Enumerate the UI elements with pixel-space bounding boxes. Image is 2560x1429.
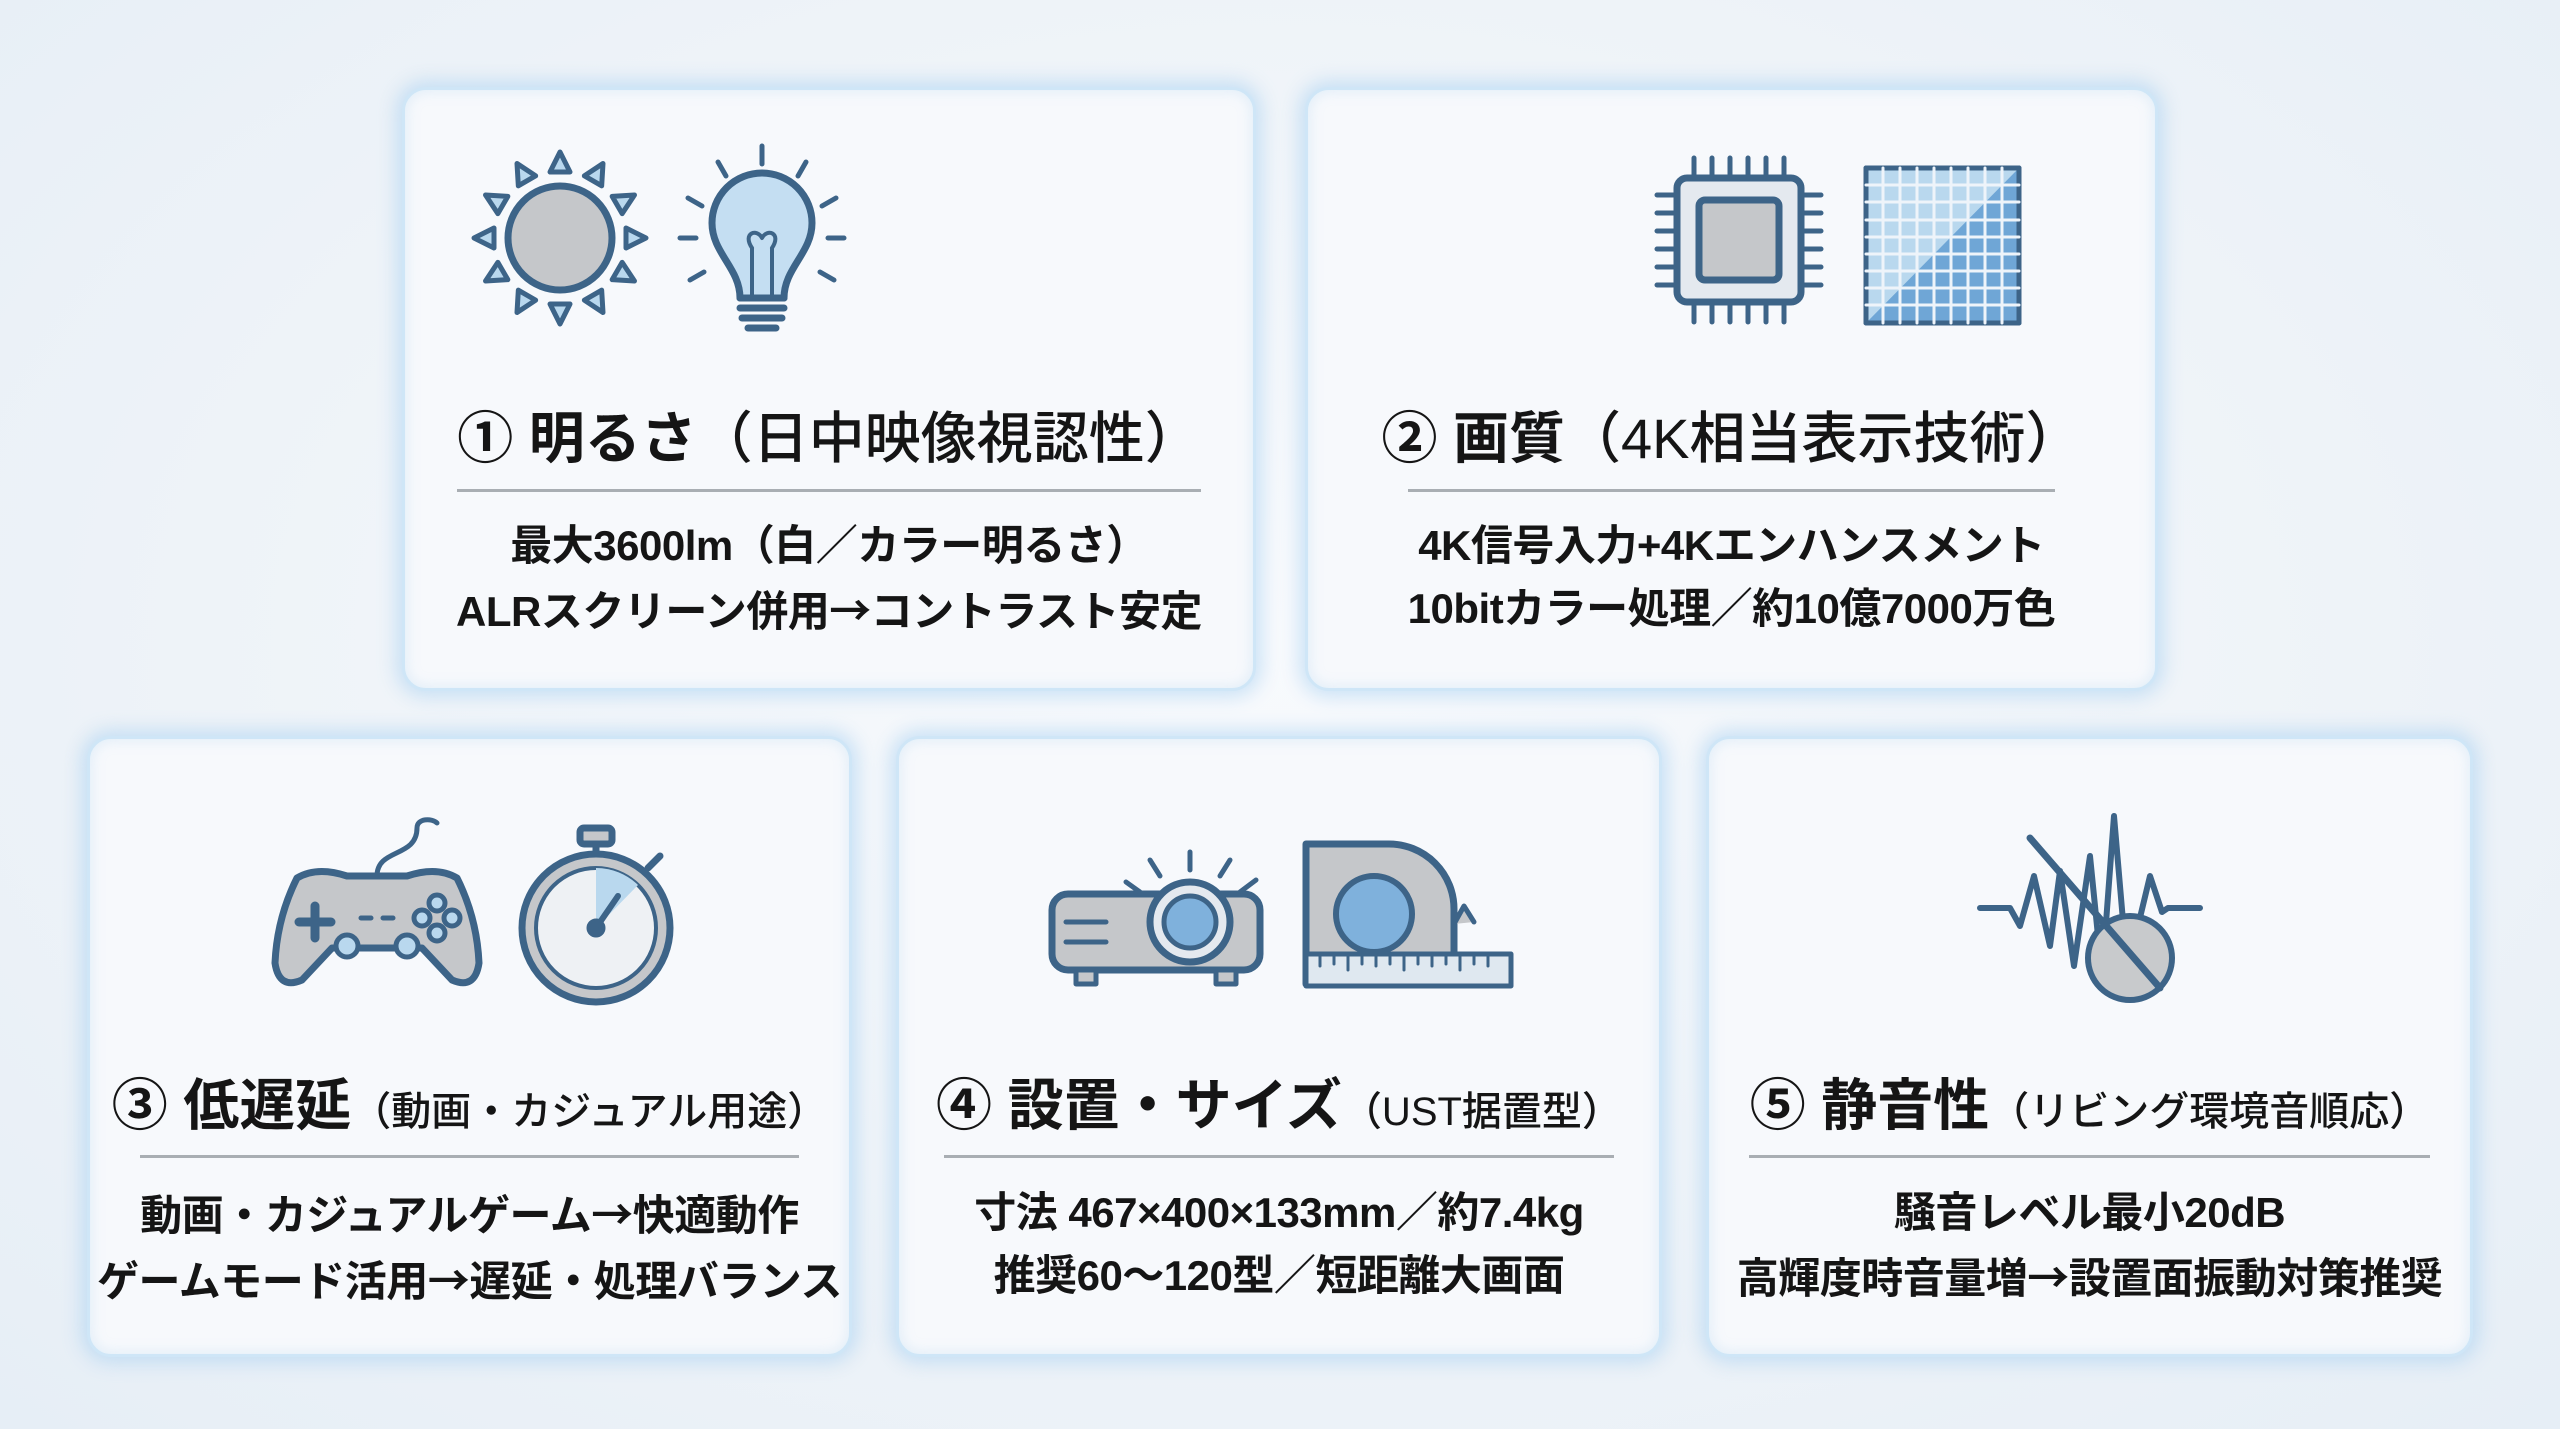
icon: projector xyxy=(1052,852,1260,984)
panel: low latency xyxy=(87,736,852,1357)
text: size details: 寸法 467×400×133mm／約7.4kg xyxy=(974,1189,1584,1236)
text: latency details: ゲームモード活用→遅延・処理バランス xyxy=(97,1248,842,1309)
heading: installation size: ④ 設置・サイズ（UST据置型） xyxy=(936,1074,1622,1137)
text: quietness details: 高輝度時音量増→設置面振動対策推奨 xyxy=(1737,1245,2442,1306)
text: quietness details xyxy=(1737,1189,2442,1306)
text: brightness details xyxy=(456,522,1202,639)
panel: picture quality xyxy=(1305,87,2158,691)
icon: game controller xyxy=(275,820,479,983)
icon: noise off xyxy=(1980,816,2200,1000)
icon: sun xyxy=(443,121,677,355)
text: quietness details: 騒音レベル最小20dB xyxy=(1894,1189,2285,1236)
text: picture quality details: 10bitカラー処理／約10億7000万色 xyxy=(1408,585,2055,632)
text: size details: 推奨60〜120型／短距離大画面 xyxy=(994,1252,1564,1299)
text: latency details: 動画・カジュアルゲーム→快適動作 xyxy=(140,1182,799,1243)
icon: stopwatch xyxy=(522,828,670,1002)
text: picture quality details xyxy=(1408,522,2055,632)
panel: brightness xyxy=(402,87,1256,691)
heading: brightness: ① 明るさ（日中映像視認性） xyxy=(457,407,1201,470)
heading: picture quality: ② 画質（4K相当表示技術） xyxy=(1381,407,2082,470)
icon: pixel grid xyxy=(1866,168,2019,323)
icon: tape measure xyxy=(1306,844,1511,986)
text: brightness details: 最大3600lm（白／カラー明るさ） xyxy=(510,522,1148,569)
text: brightness details: ALRスクリーン併用→コントラスト安定 xyxy=(456,578,1202,639)
heading: low latency: ③ 低遅延（動画・カジュアル用途） xyxy=(112,1074,827,1137)
icon: light bulb xyxy=(680,146,844,328)
text: size details xyxy=(974,1189,1584,1299)
text: picture quality details: 4K信号入力+4Kエンハンスメント xyxy=(1418,522,2045,569)
panel: quietness xyxy=(1706,736,2473,1357)
heading: quietness: ⑤ 静音性（リビング環境音順応） xyxy=(1750,1074,2429,1137)
panel: installation size xyxy=(896,736,1662,1357)
text: latency details xyxy=(97,1182,842,1309)
icon: processor chip xyxy=(1657,158,1821,322)
